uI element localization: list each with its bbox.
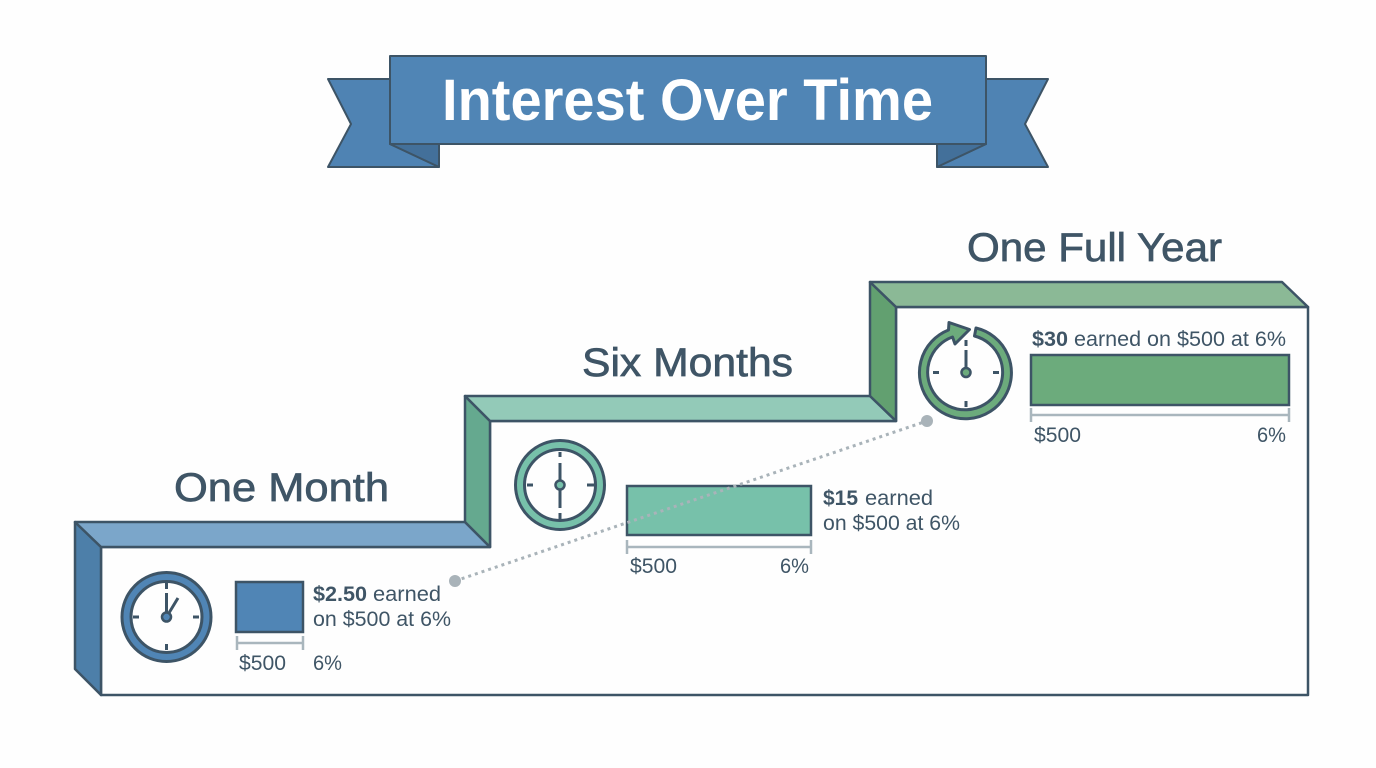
riser six months	[465, 396, 490, 547]
staircase front face	[101, 307, 1308, 695]
caption: full year	[1032, 328, 1286, 447]
tread six months	[465, 396, 896, 421]
caption: one month: 6%	[313, 652, 342, 675]
caption: six months	[630, 487, 960, 578]
step headings	[174, 226, 1222, 510]
caption: six months: $500	[630, 555, 677, 578]
caption: six months: earned	[865, 487, 933, 510]
caption: six months: $15	[823, 487, 858, 510]
clock icon: full year with circular arrow	[919, 322, 1011, 419]
ribbon main band	[390, 56, 986, 144]
caption: full year: $30	[1032, 328, 1068, 351]
caption: one month: on $500 at 6%	[313, 608, 451, 631]
caption: one month: $2.50	[313, 583, 367, 606]
ribbon left tail	[328, 79, 439, 167]
clock icon: one month	[122, 572, 211, 662]
dimension bracket: six months	[627, 540, 811, 554]
heading: one month: One Month	[174, 466, 389, 510]
caption: one month	[239, 583, 451, 675]
title ribbon	[328, 56, 1048, 167]
caption: full year: $500	[1034, 424, 1081, 447]
tread full year	[870, 282, 1308, 307]
caption: one month: earned	[373, 583, 441, 606]
bar: six months	[627, 486, 811, 535]
clock icon: six months	[516, 440, 604, 530]
ribbon left fold	[390, 144, 439, 167]
3D staircase	[75, 282, 1308, 695]
ribbon right tail	[937, 79, 1048, 167]
caption: full year: 6%	[1257, 424, 1286, 447]
riser full year	[870, 282, 896, 421]
heading: one full year: One Full Year	[967, 226, 1222, 270]
caption: six months: 6%	[780, 555, 809, 578]
ribbon right fold	[937, 144, 986, 167]
tread one month	[75, 522, 490, 547]
heading: six months: Six Months	[582, 341, 793, 385]
dimension bracket: one month	[237, 636, 303, 650]
left side face	[75, 522, 101, 695]
bar: full year	[1031, 355, 1289, 405]
dimension bracket: full year	[1031, 408, 1289, 422]
bar: one month	[236, 582, 303, 632]
dotted connector line	[449, 415, 933, 587]
caption: one month: $500	[239, 652, 286, 675]
caption: full year: earned on $500 at 6%	[1074, 328, 1286, 351]
caption: six months: on $500 at 6%	[823, 512, 960, 535]
title text: Interest Over Time	[442, 68, 933, 133]
